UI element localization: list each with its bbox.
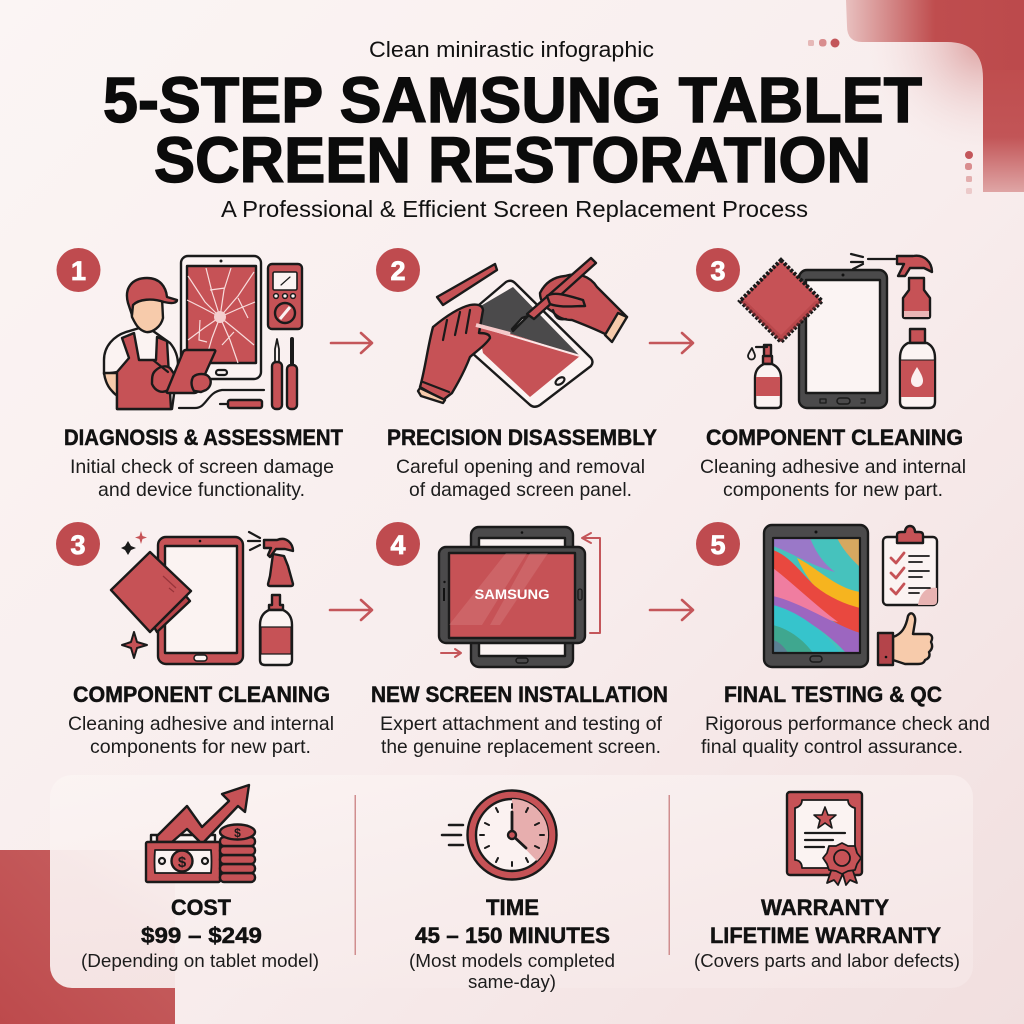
icon: money with rising arrow: $ xyxy=(234,826,241,840)
description: Rigorous performance check and xyxy=(705,713,990,735)
icon: front tablet with red Samsung screen xyxy=(439,547,585,643)
description: Initial check of screen damage xyxy=(70,456,334,478)
note: same-day) xyxy=(468,972,556,992)
heading: DIAGNOSIS & ASSESSMENT xyxy=(64,425,344,450)
value: 45 – 150 MINUTES xyxy=(415,923,610,948)
step 3 panel: cleaning xyxy=(696,248,966,501)
icon: certificate with seal xyxy=(787,792,862,885)
icon: spray bottle xyxy=(851,254,932,318)
heading: PRECISION DISASSEMBLY xyxy=(387,425,657,450)
number badge 5 xyxy=(696,522,740,566)
icon: front tablet with red Samsung screen: SAMSUNG xyxy=(474,586,550,602)
number badge 5: 5 xyxy=(710,530,726,560)
number badge 3 second xyxy=(56,522,100,566)
number badge 4 xyxy=(376,522,420,566)
value: $99 – $249 xyxy=(141,923,262,948)
step 2 panel: disassembly xyxy=(376,248,657,501)
illustration: clipboard and glove xyxy=(153,350,215,393)
description: components for new part. xyxy=(723,479,943,501)
arrow 2 to 3 xyxy=(650,333,693,353)
value: LIFETIME WARRANTY xyxy=(710,923,941,948)
number badge 3 second: 3 xyxy=(70,530,86,560)
icon: checklist clipboard xyxy=(883,526,937,605)
description xyxy=(70,456,334,501)
decoration: bottom left corner xyxy=(0,850,175,1024)
label: WARRANTY xyxy=(761,895,889,920)
panel: summary xyxy=(50,775,973,992)
arrow 1 to 2 xyxy=(331,333,372,353)
description xyxy=(380,713,663,758)
icon: screwdrivers and tester xyxy=(179,339,297,409)
number badge 3 xyxy=(696,248,740,292)
icon: installation arrows xyxy=(441,533,600,657)
description xyxy=(68,713,334,758)
description: and device functionality. xyxy=(98,479,305,501)
step 1 panel: diagnosis xyxy=(56,248,344,501)
heading: COMPONENT CLEANING xyxy=(706,425,963,450)
number badge 1 xyxy=(56,248,100,292)
arrow 3 to 4 xyxy=(330,600,372,620)
description xyxy=(700,456,966,501)
heading: NEW SCREEN INSTALLATION xyxy=(371,682,668,707)
icon: red tablet xyxy=(158,537,243,664)
cost block xyxy=(81,785,319,971)
label: COST xyxy=(171,895,232,920)
icon: tablet xyxy=(799,270,887,408)
icon: left hand xyxy=(418,305,510,403)
description: final quality control assurance. xyxy=(701,736,963,758)
number badge 2: 2 xyxy=(390,256,406,286)
heading: COMPONENT CLEANING xyxy=(73,682,330,707)
description: of damaged screen panel. xyxy=(409,479,632,501)
title: 5-STEP SAMSUNG TABLET xyxy=(103,64,922,136)
icon: bottle xyxy=(260,595,292,665)
icon: back tablet xyxy=(471,527,573,667)
step 5 panel: installation xyxy=(371,522,668,758)
number badge 3: 3 xyxy=(710,256,726,286)
label: TIME xyxy=(486,895,539,920)
icon: microfiber cloth xyxy=(740,260,822,342)
icon: thumbs up xyxy=(878,613,932,665)
description xyxy=(396,456,645,501)
subtitle: A Professional & Efficient Screen Replacement Process xyxy=(221,196,808,222)
note xyxy=(409,951,615,992)
title: SCREEN RESTORATION xyxy=(154,124,871,196)
heading: FINAL TESTING & QC xyxy=(724,682,942,707)
number badge 2 xyxy=(376,248,420,292)
eyebrow text: Clean minirastic infographic xyxy=(369,37,654,62)
icon: spudger with right hand xyxy=(512,258,627,342)
time block xyxy=(409,790,615,992)
note: (Depending on tablet model) xyxy=(81,951,319,971)
warranty block xyxy=(694,792,960,971)
description: Careful opening and removal xyxy=(396,456,645,478)
illustration: technician xyxy=(104,278,178,409)
number badge 4: 4 xyxy=(390,530,406,560)
step 6 panel: testing xyxy=(696,522,990,758)
description: components for new part. xyxy=(90,736,311,758)
icon: clock xyxy=(442,790,556,880)
icon: folded cloth xyxy=(111,552,191,632)
icon: money with rising arrow xyxy=(146,785,255,882)
icon: sparkles xyxy=(121,531,147,658)
icon: pry strip xyxy=(437,264,497,305)
decoration: top right corner xyxy=(808,0,1024,194)
icon: large bottle xyxy=(900,329,935,408)
step 4 panel: cleaning repeat xyxy=(56,522,334,758)
icon: small pump bottle xyxy=(748,345,781,408)
description: Cleaning adhesive and internal xyxy=(700,456,966,478)
note: (Most models completed xyxy=(409,951,615,971)
icon: tablet with colourful screen xyxy=(764,525,868,667)
note: (Covers parts and labor defects) xyxy=(694,951,960,971)
icon: multimeter xyxy=(268,264,302,329)
title xyxy=(103,64,922,196)
icon: spray bottle xyxy=(248,532,293,586)
description: Cleaning adhesive and internal xyxy=(68,713,334,735)
description: the genuine replacement screen. xyxy=(381,736,661,758)
description xyxy=(701,713,990,758)
icon: money with rising arrow: $ xyxy=(178,854,187,871)
number badge 1: 1 xyxy=(71,256,86,286)
arrow 4 to 5 xyxy=(650,600,693,620)
icon: tablet opened xyxy=(450,281,592,407)
description: Expert attachment and testing of xyxy=(380,713,663,735)
icon: cracked tablet xyxy=(181,256,261,379)
